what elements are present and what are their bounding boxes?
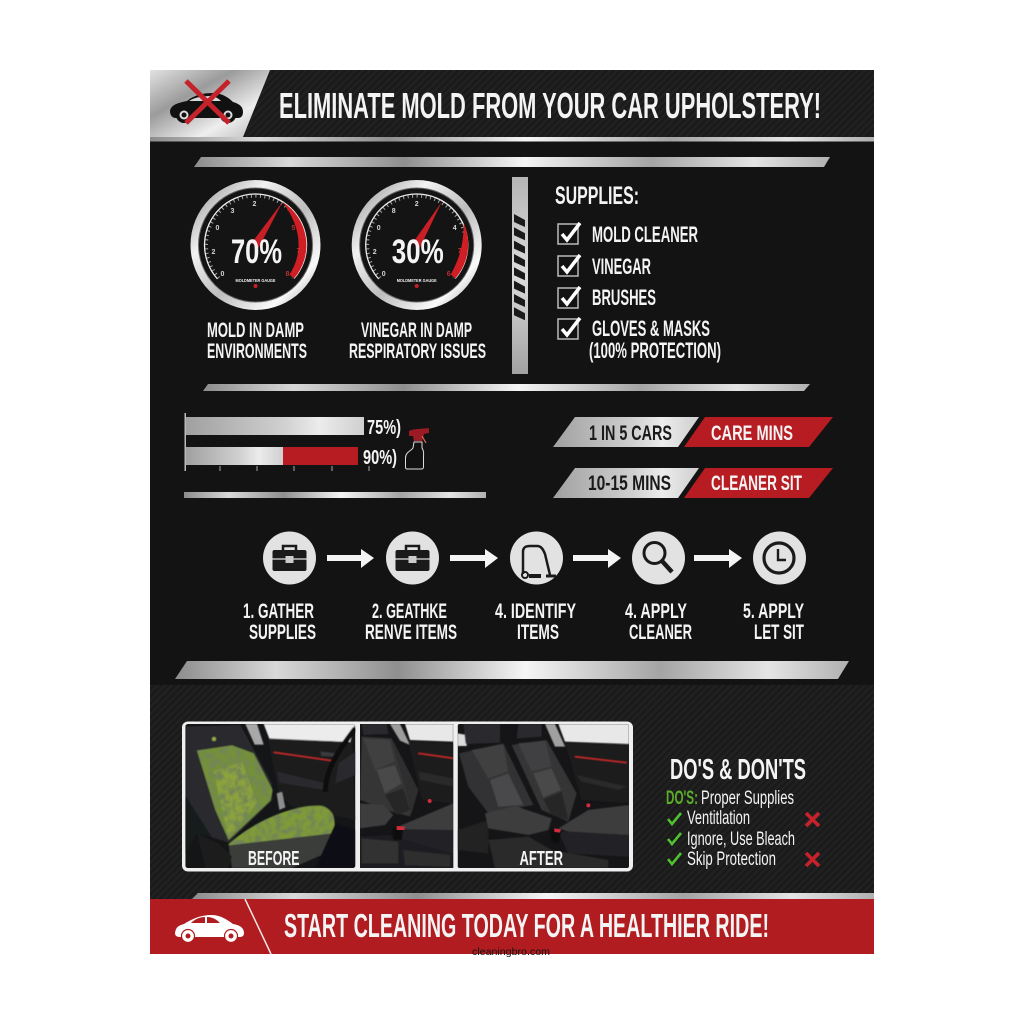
gauge: 30% vinegar: 7 [458, 248, 462, 255]
label: after: AFTER [520, 847, 563, 870]
step labels: SUPPLIES [249, 621, 316, 644]
dos and donts panel [666, 754, 819, 870]
photo: before, mouldy seat [185, 724, 355, 868]
step labels: ITEMS [517, 621, 559, 644]
supply items: (100% PROTECTION) [589, 338, 721, 363]
supply items: BRUSHES [592, 285, 656, 310]
footer banner [150, 899, 874, 954]
arrow 2 [450, 549, 498, 568]
icon: toolbox 1 [263, 532, 316, 584]
process steps [243, 532, 806, 644]
red zone [451, 223, 468, 278]
list text: Skip Protection [687, 849, 776, 870]
icon: magnifier [632, 532, 685, 584]
gauge: 30% vinegar: 0 [377, 225, 381, 232]
step labels: 4. APPLY [625, 600, 687, 623]
gauge: 70% mold: 2 [212, 249, 216, 256]
step labels: RENVE ITEMS [365, 621, 457, 644]
step labels: LET SIT [754, 621, 804, 644]
stat: 10-15 mins: CLEANER SIT [711, 472, 802, 495]
supply items: GLOVES & MASKS [592, 316, 710, 341]
stat: 1 in 5 cars: CARE MINS [711, 422, 793, 445]
before and after photo strip [182, 722, 633, 872]
gauge: 70% mold: 70% [231, 233, 282, 271]
list text [666, 788, 795, 870]
step labels: 5. APPLY [743, 600, 804, 623]
supplies heading: SUPPLIES: [555, 182, 639, 210]
gauge: 70% mold: 0 [221, 271, 225, 278]
bar chart: 90%) [363, 447, 397, 469]
icon: spray bottle [406, 428, 429, 469]
gauge: 70% mold: 8 [286, 271, 290, 278]
lower carbon section [150, 685, 874, 899]
arrow 4 [694, 549, 742, 568]
icon: car crossed out [170, 81, 243, 123]
gauge: 30% vinegar: MOLDMETER GAUGE [397, 278, 437, 283]
gauge: 30% vinegar: 30% [392, 233, 444, 271]
header silver corner [150, 70, 270, 137]
poster background [150, 70, 874, 954]
vertical silver divider [512, 177, 528, 374]
stat: 1 in 5 cars [553, 417, 833, 447]
gauge caption right: RESPIRATORY ISSUES [349, 340, 486, 363]
gauge: 30% vinegar: 8 [392, 208, 396, 215]
gauge: 70% mold: 5 [292, 225, 296, 232]
gauge: 30% vinegar: 0 [382, 271, 386, 278]
photo: after, clean seats [458, 724, 629, 868]
green ticks [668, 813, 681, 864]
red zone [282, 202, 306, 278]
supplies checklist [555, 182, 721, 363]
step labels: 1. GATHER [243, 600, 314, 623]
gauge: 30% vinegar: 4 [453, 225, 457, 232]
gauge caption right [349, 319, 486, 363]
arrow 1 [327, 549, 374, 568]
dos heading: DO'S & DON'TS [670, 754, 806, 786]
gauge: 70% mold: 7 [297, 248, 301, 255]
gauge: 70% mold: 3 [231, 208, 235, 215]
gauge: 70% mold [190, 180, 320, 310]
supply items [589, 222, 721, 363]
step labels [243, 600, 804, 644]
gauge: 30% vinegar: 6 [447, 271, 451, 278]
gauge caption left: MOLD IN DAMP [207, 319, 304, 342]
step labels: 2. GEATHKE [372, 600, 447, 623]
gauge: 70% mold: 0 [216, 225, 220, 232]
list text: Ventitlation [687, 808, 750, 829]
red crosses [806, 813, 819, 866]
gauge caption left: ENVIRONMENTS [207, 340, 307, 363]
icon: vacuum [510, 532, 563, 584]
bar chart: 75%) [367, 417, 401, 439]
gauge: 70% mold: MOLDMETER GAUGE [236, 278, 276, 283]
icon: clock [753, 532, 806, 584]
gauge caption right: VINEGAR IN DAMP [361, 319, 472, 342]
list text: Ignore, Use Bleach [687, 829, 795, 850]
list text: DO'S: [666, 788, 698, 809]
step labels: CLEANER [629, 621, 692, 644]
step labels: 4. IDENTIFY [495, 600, 576, 623]
checkboxes [558, 223, 580, 339]
list text: Proper Supplies [701, 788, 794, 809]
gauge: 30% vinegar: 2 [373, 249, 377, 256]
photo: middle seat [360, 724, 453, 868]
header banner [150, 70, 874, 142]
gauge: 30% vinegar: 2 [415, 201, 419, 208]
gauge: 70% mold: 2 [253, 201, 257, 208]
stat: 10-15 mins [553, 468, 833, 498]
arrow 3 [573, 549, 621, 568]
icon: toolbox 2 [386, 532, 439, 584]
gauge caption left [207, 319, 307, 363]
bar chart [184, 413, 401, 471]
supply items: VINEGAR [592, 254, 651, 279]
watermark: cleaningbro.com [472, 946, 550, 958]
icon: car [175, 915, 244, 942]
gauge: 30% vinegar [352, 180, 482, 310]
supply items: MOLD CLEANER [592, 222, 698, 247]
stat: 1 in 5 cars: 1 IN 5 CARS [589, 422, 672, 445]
stat: 10-15 mins: 10-15 MINS [588, 472, 671, 495]
label: before: BEFORE [248, 847, 300, 870]
